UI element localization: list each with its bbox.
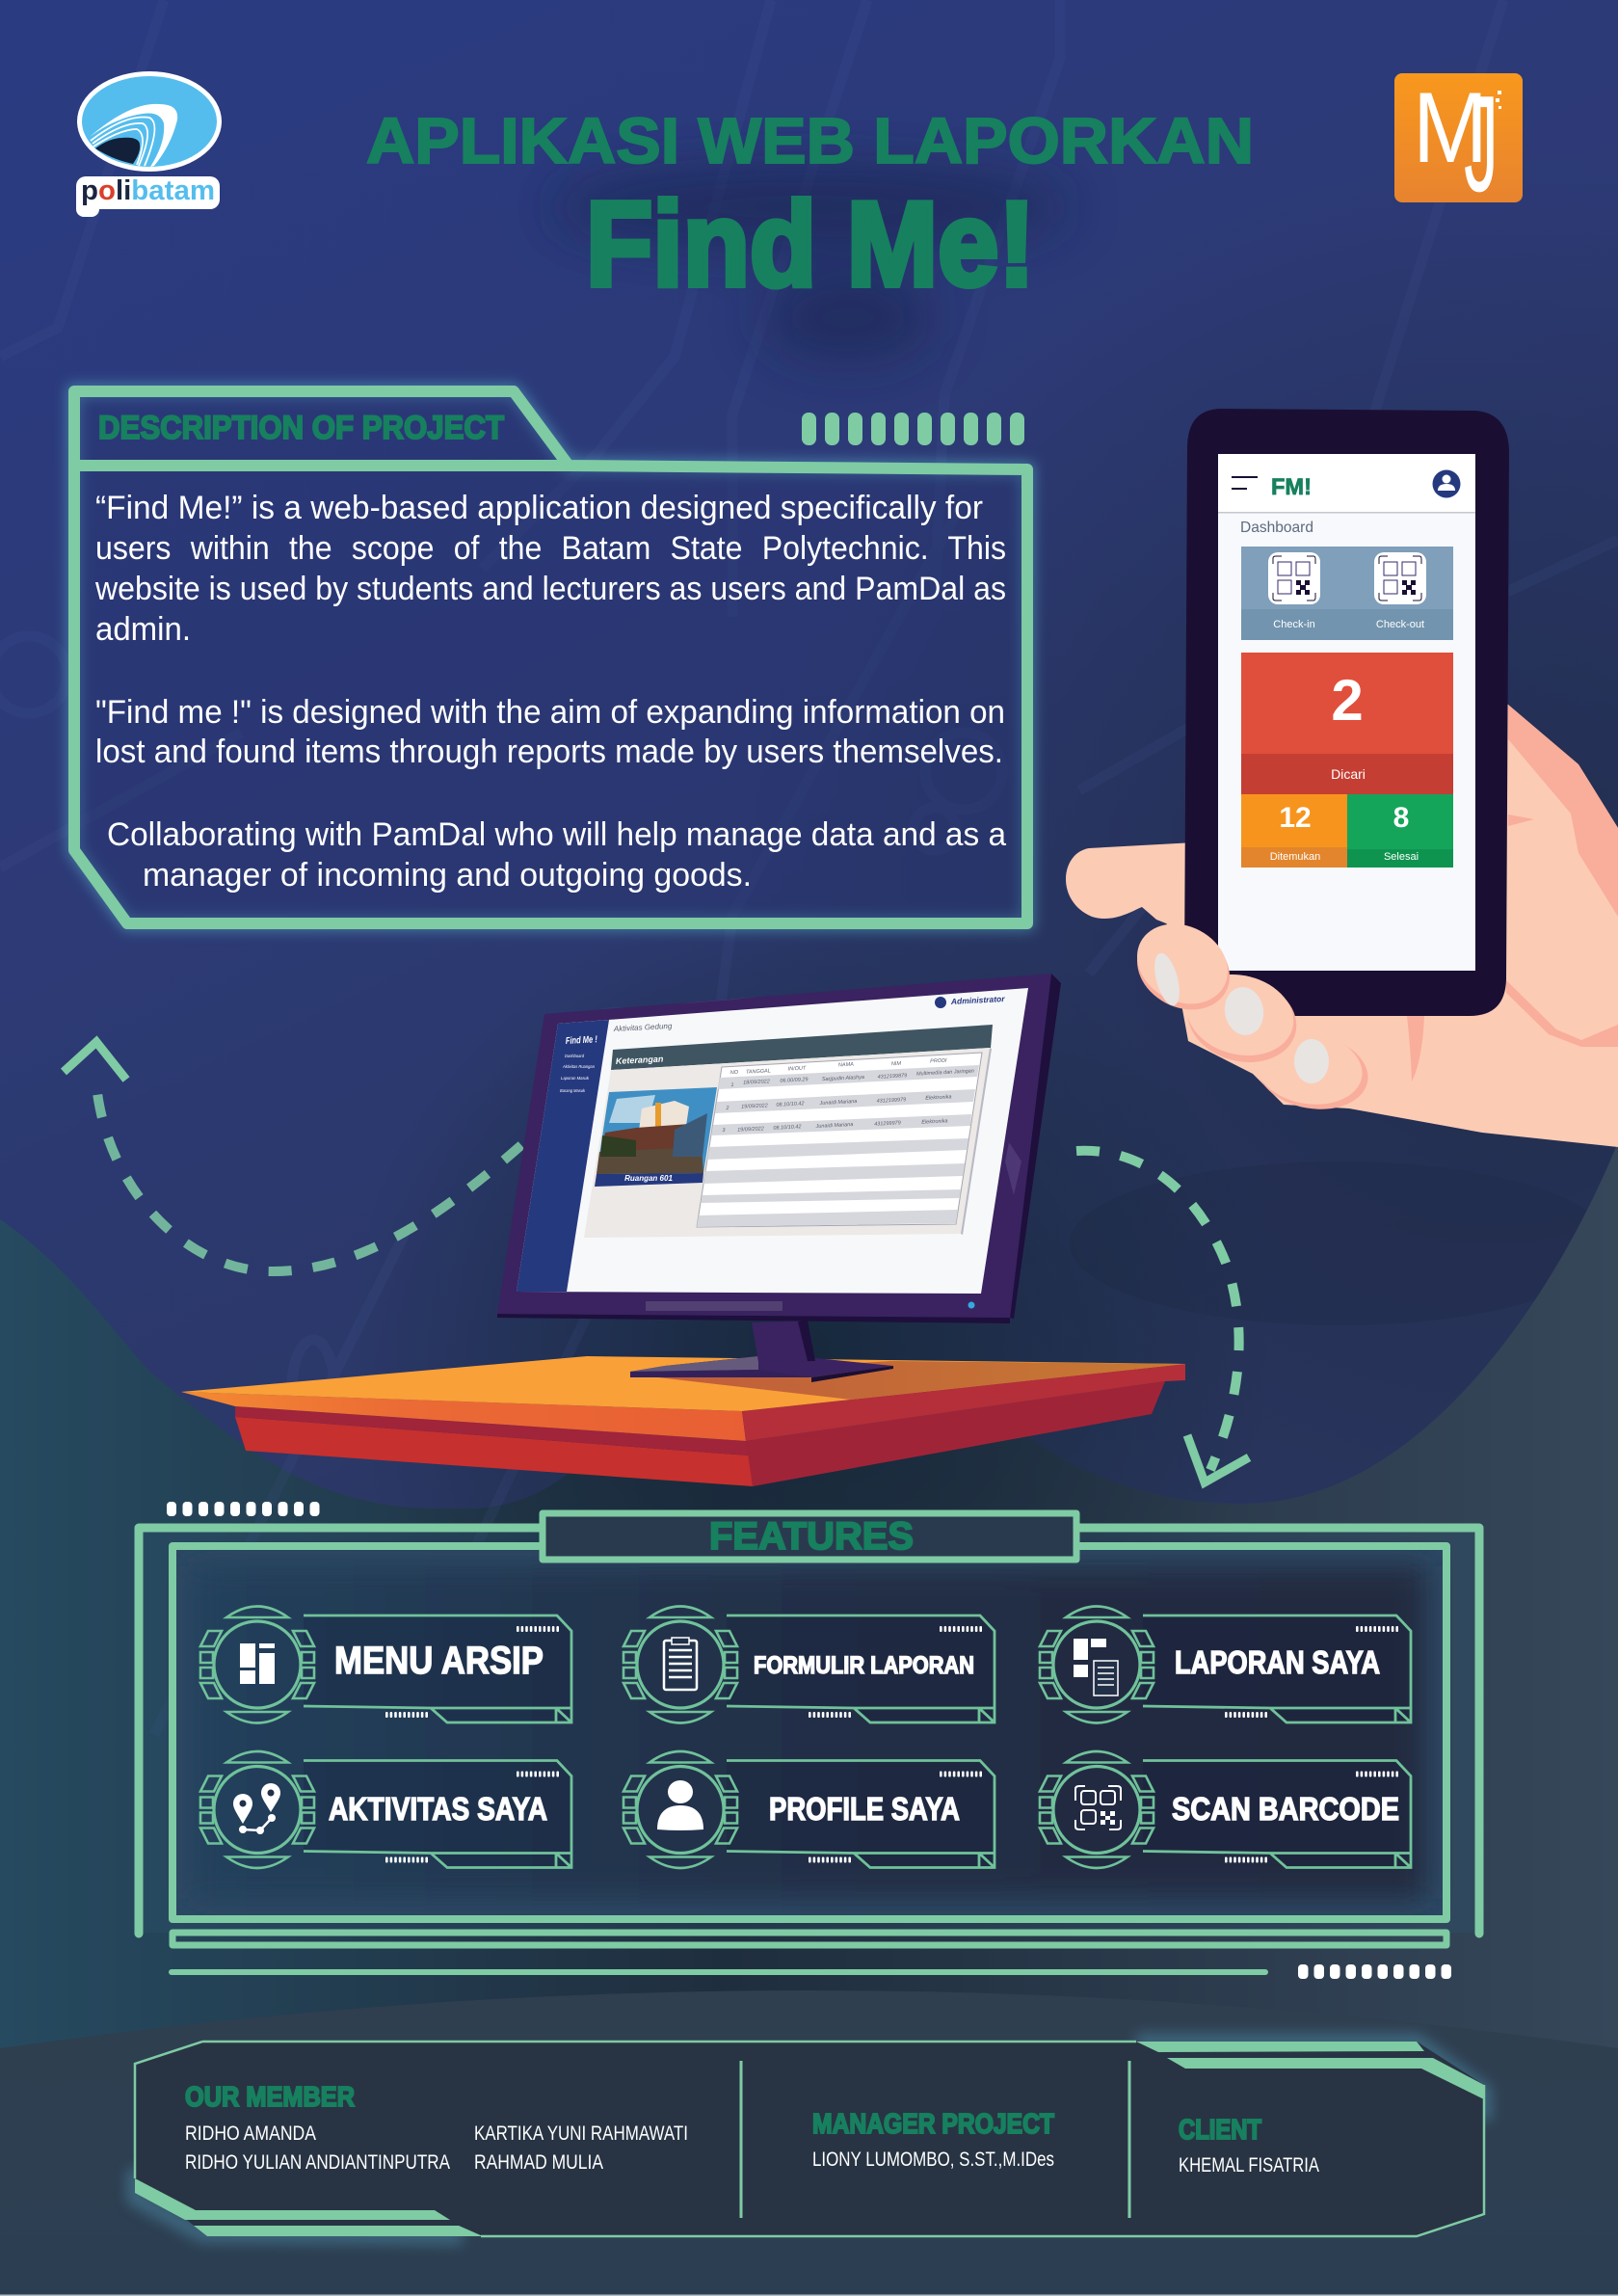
decorative pills bbox=[802, 413, 1024, 445]
screen labels: Find Me ! bbox=[566, 1034, 598, 1047]
our member bbox=[185, 2082, 688, 2174]
screen table: NAMA bbox=[838, 1062, 854, 1068]
title shadow bbox=[549, 164, 1070, 361]
feature: aktivitas saya bbox=[200, 1751, 571, 1868]
title: Find Me!: Find Me! bbox=[586, 178, 1035, 311]
platform table bbox=[181, 1356, 1185, 1486]
feature: laporan saya bbox=[1040, 1606, 1411, 1723]
screen table: 431299979 bbox=[874, 1120, 901, 1128]
features title box: FEATURES bbox=[709, 1515, 914, 1558]
phone logo fm: FM! bbox=[1271, 474, 1312, 500]
our member: RIDHO YULIAN ANDIANTINPUTRA bbox=[185, 2151, 450, 2174]
screen labels: Keterangan bbox=[616, 1054, 664, 1066]
screen table: 2 bbox=[725, 1106, 729, 1111]
hand back bbox=[1066, 694, 1618, 1147]
tile: dicari bbox=[1241, 653, 1453, 794]
tile: ditemukan: 12 bbox=[1279, 802, 1312, 834]
screen labels: Laporan Masuk bbox=[561, 1076, 590, 1081]
screen table: 19/09/2022 bbox=[737, 1126, 764, 1134]
feature: profile saya: PROFILE SAYA bbox=[769, 1791, 960, 1827]
description text: “Find Me!” is a web-based application designed specifically for bbox=[95, 490, 983, 526]
tile: ditemukan: Ditemukan bbox=[1270, 851, 1320, 863]
tile: selesai: 8 bbox=[1393, 802, 1409, 834]
screen table: 1 bbox=[730, 1082, 734, 1088]
manager project bbox=[812, 2109, 1054, 2171]
screen table: Sarjpudin Alashya bbox=[822, 1075, 864, 1082]
screen table: Elektronika bbox=[921, 1118, 948, 1126]
screen table: NIM bbox=[891, 1061, 902, 1067]
heading: description of project: DESCRIPTION OF PROJECT bbox=[98, 410, 504, 446]
tile: selesai bbox=[1347, 794, 1453, 868]
screen labels: Barang Masuk bbox=[560, 1088, 586, 1093]
description text: admin. bbox=[95, 611, 191, 648]
manager project: MANAGER PROJECT bbox=[812, 2109, 1054, 2140]
features glow backdrop bbox=[139, 1528, 1479, 1933]
screen table: Multimedia dan Jaringan bbox=[916, 1068, 974, 1078]
our member: RAHMAD MULIA bbox=[474, 2151, 603, 2174]
logo wordmark bbox=[76, 175, 220, 217]
screen table bbox=[697, 1053, 982, 1227]
screen labels: Ruangan 601 bbox=[624, 1174, 673, 1183]
frame lines bbox=[139, 1528, 1479, 1972]
feature: formulir laporan bbox=[623, 1606, 995, 1723]
tile: dicari: Dicari bbox=[1331, 766, 1366, 782]
dividers bbox=[741, 2061, 1129, 2218]
our member: RIDHO AMANDA bbox=[185, 2122, 316, 2145]
check-in panel bbox=[1241, 547, 1453, 640]
monitor screen bbox=[517, 988, 1028, 1294]
feature: scan barcode bbox=[1040, 1751, 1411, 1868]
panel: description of project bbox=[74, 391, 1027, 923]
screen table: Junaidi Mariana bbox=[814, 1122, 853, 1130]
logo: polibatam bbox=[76, 71, 222, 217]
feature: aktivitas saya: AKTIVITAS SAYA bbox=[329, 1791, 547, 1827]
feature: laporan saya: LAPORAN SAYA bbox=[1175, 1644, 1380, 1680]
feature: scan barcode: SCAN BARCODE bbox=[1172, 1791, 1399, 1827]
screen table: 08.10/10.42 bbox=[773, 1124, 802, 1132]
title: APLIKASI WEB LAPORKAN: APLIKASI WEB LAPORKAN bbox=[366, 105, 1254, 177]
monitor bbox=[497, 974, 1061, 1382]
arrow: dashed left bbox=[64, 1042, 521, 1271]
our member: OUR MEMBER bbox=[185, 2082, 355, 2113]
screen labels: Aktivitas Ruangan bbox=[562, 1064, 595, 1069]
logo wordmark: polibatam bbox=[81, 175, 215, 206]
hand fingers bbox=[1123, 909, 1374, 1117]
logo: MJ bbox=[1394, 67, 1523, 221]
thumb bbox=[1066, 842, 1195, 935]
screen table: 08.10/10.42 bbox=[776, 1101, 805, 1108]
screen photo bbox=[597, 1087, 717, 1174]
hamburger icon bbox=[1232, 476, 1258, 490]
our member: KARTIKA YUNI RAHMAWATI bbox=[474, 2122, 688, 2145]
screen table: PRODI bbox=[930, 1058, 947, 1064]
screen table: 06.00/09.29 bbox=[780, 1077, 809, 1084]
description text: Collaborating with PamDal who will help manage data and as a bbox=[107, 816, 1006, 853]
description text: "Find me !" is designed with the aim of expanding information on bbox=[95, 694, 1005, 731]
avatar icon bbox=[1432, 470, 1461, 497]
screen table: TANGGAL bbox=[746, 1068, 771, 1076]
logo: MJ: J bbox=[1464, 67, 1499, 221]
panel: credits bbox=[135, 2042, 1484, 2236]
screen table: 4312199879 bbox=[878, 1073, 907, 1081]
screen table: Elektronika bbox=[925, 1094, 952, 1102]
feature: menu arsip: MENU ARSIP bbox=[334, 1640, 544, 1682]
screen labels: Aktivitas Gedung bbox=[613, 1022, 673, 1033]
description text: lost and found items through reports made by users themselves. bbox=[95, 734, 1003, 770]
accents bbox=[135, 2042, 1484, 2236]
screen table: 3 bbox=[722, 1128, 727, 1134]
description text: manager of incoming and outgoing goods. bbox=[143, 857, 752, 894]
description text bbox=[94, 490, 1006, 894]
screen table: 4312199979 bbox=[877, 1097, 906, 1105]
dashboard label: Dashboard bbox=[1240, 520, 1313, 536]
description text: website is used by students and lecturers as users and PamDal as bbox=[94, 571, 1006, 607]
tile: selesai: Selesai bbox=[1384, 851, 1419, 863]
phone bbox=[1184, 409, 1509, 1016]
client: CLIENT bbox=[1179, 2115, 1261, 2146]
features title box bbox=[543, 1513, 1076, 1560]
tile: ditemukan bbox=[1241, 794, 1347, 868]
monitor stand bbox=[630, 1321, 893, 1382]
manager project: LIONY LUMOMBO, S.ST.,M.IDes bbox=[812, 2149, 1054, 2171]
screen table: IN/OUT bbox=[787, 1065, 807, 1072]
feature: profile saya bbox=[623, 1751, 995, 1868]
description text: users within the scope of the Batam State Polytechnic. This bbox=[95, 530, 1006, 567]
screen labels: Administrator bbox=[950, 994, 1005, 1006]
screen table: NO bbox=[730, 1070, 739, 1076]
tile: dicari: 2 bbox=[1331, 668, 1364, 733]
arrow: dashed right bbox=[1076, 1151, 1249, 1482]
pills bottom right bbox=[1298, 1964, 1451, 1979]
panel: features bbox=[139, 1502, 1479, 1979]
screen table: 19/09/2022 bbox=[741, 1103, 768, 1110]
client: KHEMAL FISATRIA bbox=[1179, 2154, 1319, 2176]
check-in panel: Check-out bbox=[1376, 619, 1424, 630]
screen labels: Dashboard bbox=[565, 1054, 584, 1058]
screen labels bbox=[560, 994, 1005, 1183]
phone screen bbox=[1218, 454, 1475, 971]
screen table: 18/09/2022 bbox=[743, 1079, 770, 1086]
client bbox=[1179, 2115, 1319, 2176]
feature: menu arsip bbox=[200, 1606, 571, 1723]
feature: formulir laporan: FORMULIR LAPORAN bbox=[754, 1652, 974, 1679]
pills top left bbox=[167, 1502, 320, 1516]
screen table: Junaidi Mariana bbox=[818, 1099, 857, 1107]
check-in panel: Check-in bbox=[1273, 619, 1315, 630]
logo: MJ: M bbox=[1413, 72, 1488, 184]
